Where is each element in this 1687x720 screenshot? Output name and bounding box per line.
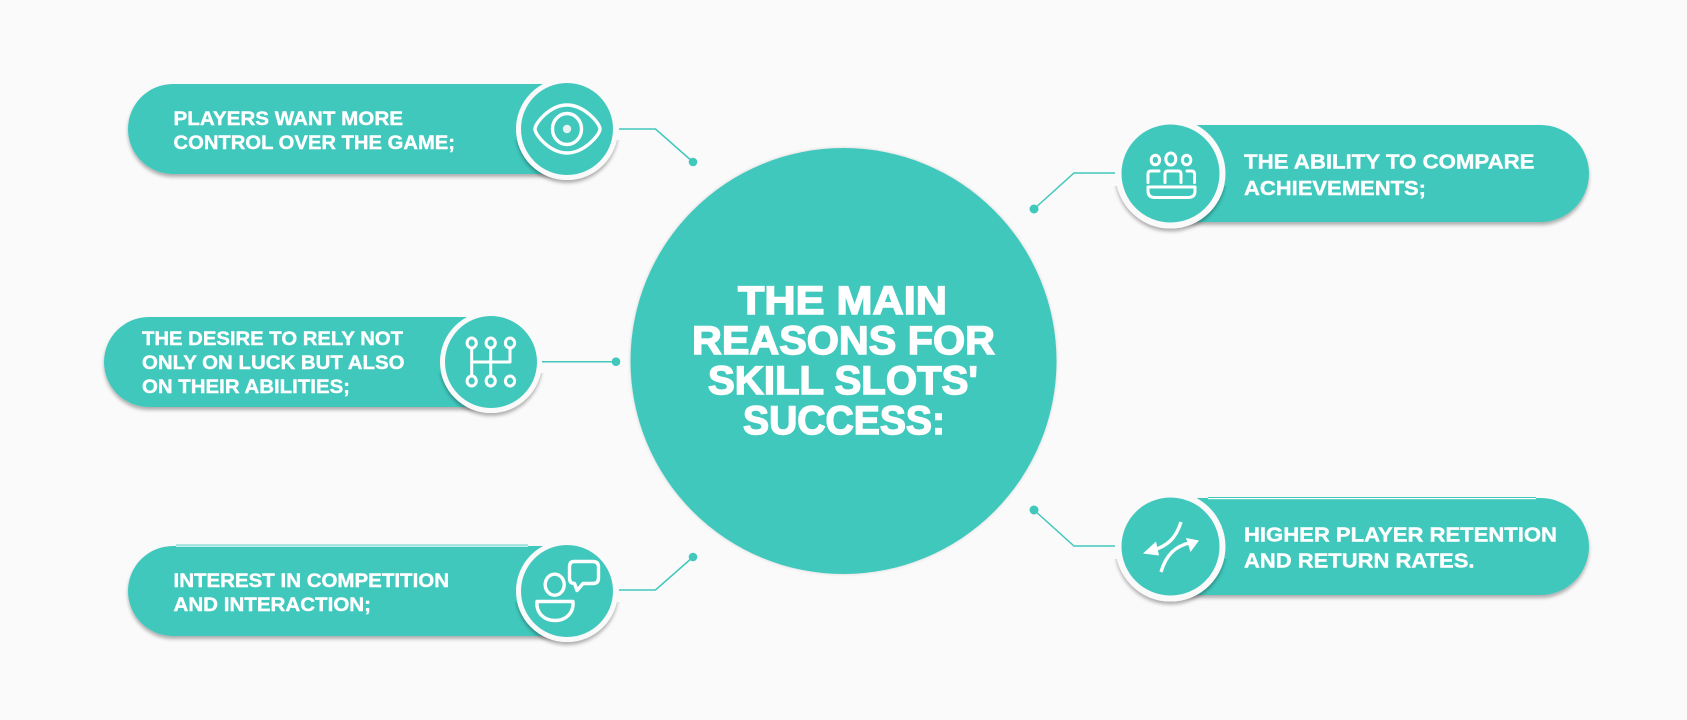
item: ability to compare achievements: ACHIEVEMENTS;	[1244, 178, 1426, 200]
item: desire to rely on abilities: ONLY ON LUCK BUT ALSO	[142, 352, 404, 374]
icon: group at table	[1148, 153, 1195, 198]
item: interest in competition	[128, 540, 697, 642]
item: players want more control: CONTROL OVER THE GAME;	[174, 132, 455, 154]
item: higher player retention: HIGHER PLAYER RETENTION	[1244, 524, 1557, 546]
item: ability to compare achievements: THE ABILITY TO COMPARE	[1244, 152, 1534, 174]
item: desire to rely on abilities: ON THEIR ABILITIES;	[142, 376, 350, 398]
item: players want more control: PLAYERS WANT MORE	[174, 108, 403, 130]
central circle with title: THE MAIN	[738, 279, 947, 323]
icon: crossing arrows	[1143, 522, 1199, 572]
item: higher player retention	[1030, 492, 1589, 602]
central circle with title: REASONS FOR	[692, 319, 995, 363]
icon: gear shift	[467, 338, 515, 386]
central circle with title: SUCCESS:	[743, 399, 945, 443]
icon: eye	[535, 105, 600, 153]
item: ability to compare achievements	[1030, 118, 1589, 228]
item: interest in competition: AND INTERACTION;	[174, 594, 371, 616]
item: interest in competition: INTEREST IN COMPETITION	[174, 570, 449, 592]
item: desire to rely on abilities: THE DESIRE TO RELY NOT	[142, 328, 403, 350]
central circle with title	[630, 148, 1056, 574]
item: higher player retention: AND RETURN RATES.	[1244, 550, 1474, 572]
item: desire to rely on abilities	[104, 311, 620, 413]
icon: person with speech bubble	[537, 562, 598, 620]
item: players want more control	[128, 78, 697, 180]
central circle with title: SKILL SLOTS'	[708, 359, 978, 403]
